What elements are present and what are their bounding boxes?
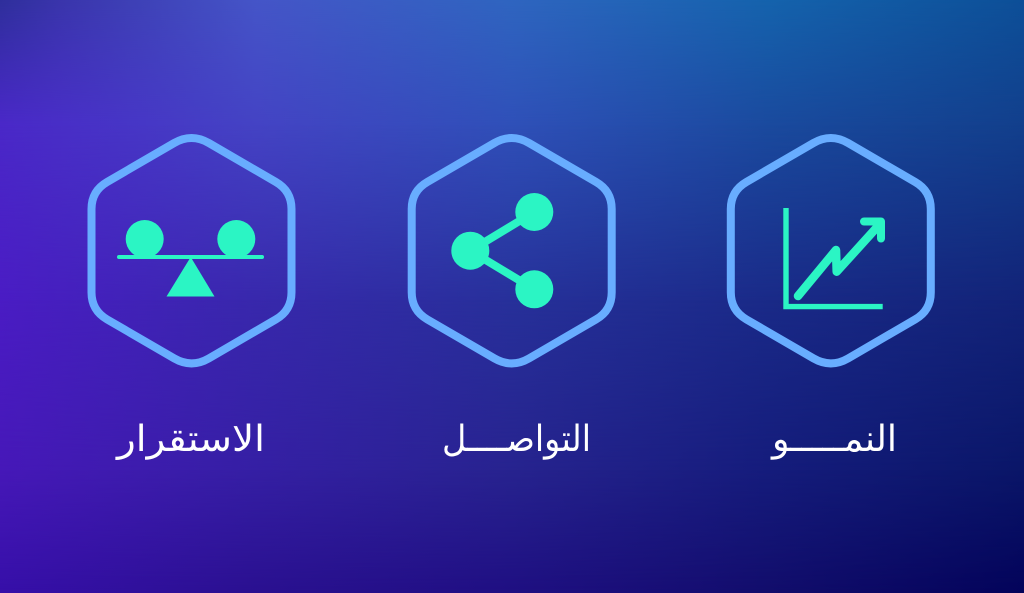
icon: growth chart <box>786 208 883 307</box>
panel: stability <box>92 138 292 460</box>
icon: balance scale <box>117 220 264 296</box>
label: growth: النمـــــو <box>770 419 897 460</box>
hexagon frame: growth <box>731 138 931 363</box>
hexagon frame: communication <box>412 138 612 363</box>
panel: growth <box>731 138 931 460</box>
icon: share network <box>451 193 553 308</box>
hexagon frame: stability <box>92 138 292 363</box>
label: communication: التواصــــل <box>442 419 591 460</box>
panel: communication <box>412 138 612 460</box>
label: stability: الاستقرار <box>115 419 265 460</box>
